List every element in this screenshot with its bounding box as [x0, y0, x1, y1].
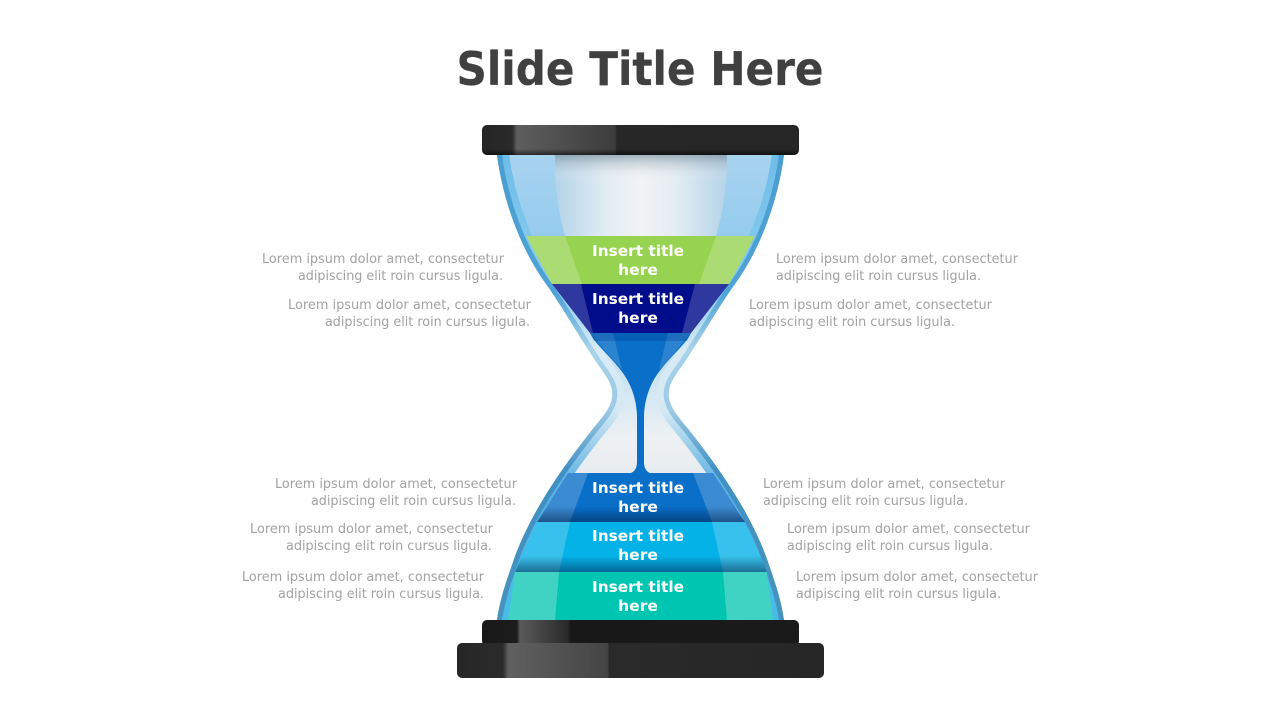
- text block: right 1: adipiscing elit roin cursus ligula.: [776, 268, 981, 284]
- layer: sand stream: [590, 333, 691, 474]
- text block: left 1: Lorem ipsum dolor amet, consectetur: [262, 251, 504, 267]
- text block: right 1: Lorem ipsum dolor amet, consectetur: [776, 251, 1018, 267]
- glass body: [490, 150, 790, 620]
- text block: left 3: adipiscing elit roin cursus ligula.: [311, 493, 516, 509]
- text block: right 2: [749, 297, 992, 330]
- text block: left 4: adipiscing elit roin cursus ligula.: [286, 538, 492, 554]
- text block: right 3: adipiscing elit roin cursus ligula.: [763, 493, 968, 509]
- label: Insert title: [592, 527, 684, 545]
- text block: right 4: adipiscing elit roin cursus ligula.: [787, 538, 993, 554]
- text block: right 5: Lorem ipsum dolor amet, consectetur: [796, 569, 1038, 585]
- title: Slide Title Here: [456, 42, 824, 96]
- text block: right 4: Lorem ipsum dolor amet, consectetur: [787, 521, 1030, 537]
- text block: right 3: [763, 476, 1005, 509]
- layer: blue: [537, 473, 745, 522]
- text block: right 1: [776, 251, 1018, 284]
- layer: cyan: here: [618, 546, 658, 564]
- bottom base: [457, 643, 824, 678]
- layer: green: here: [618, 261, 658, 279]
- layer: cyan: [515, 522, 767, 572]
- text block: left 3: Lorem ipsum dolor amet, consectetur: [275, 476, 517, 492]
- layer: navy: here: [618, 309, 658, 327]
- label: Insert title: [592, 479, 684, 497]
- text block: left 2: adipiscing elit roin cursus ligula.: [325, 314, 530, 330]
- text block: right 5: [796, 569, 1038, 602]
- text block: left 1: [262, 251, 504, 284]
- text block: right 2: adipiscing elit roin cursus ligula.: [749, 314, 955, 330]
- layer: blue: here: [618, 498, 658, 516]
- layer: green: [526, 236, 755, 284]
- text block: left 1: adipiscing elit roin cursus ligula.: [298, 268, 503, 284]
- text block: right 2: Lorem ipsum dolor amet, consectetur: [749, 297, 992, 313]
- hourglass: [457, 125, 824, 678]
- text block: right 4: [787, 521, 1030, 554]
- layer: teal: [508, 572, 773, 621]
- bottom upper cap: [482, 620, 799, 646]
- text block: left 4: Lorem ipsum dolor amet, consectetur: [250, 521, 493, 537]
- layer: navy: [552, 284, 729, 333]
- label: Insert title: [592, 242, 684, 260]
- label: Insert title: [592, 290, 684, 308]
- label: Insert title: [592, 578, 684, 596]
- text block: left 2: Lorem ipsum dolor amet, consectetur: [288, 297, 531, 313]
- top cap: [482, 125, 799, 155]
- text block: left 2: [288, 297, 531, 330]
- text block: left 5: [242, 569, 484, 602]
- layer: teal: here: [618, 597, 658, 615]
- text block: left 4: [250, 521, 493, 554]
- text block: left 5: adipiscing elit roin cursus ligula.: [278, 586, 484, 602]
- text block: left 5: Lorem ipsum dolor amet, consectetur: [242, 569, 484, 585]
- text block: right 3: Lorem ipsum dolor amet, consectetur: [763, 476, 1005, 492]
- text block: right 5: adipiscing elit roin cursus ligula.: [796, 586, 1001, 602]
- text block: left 3: [275, 476, 517, 509]
